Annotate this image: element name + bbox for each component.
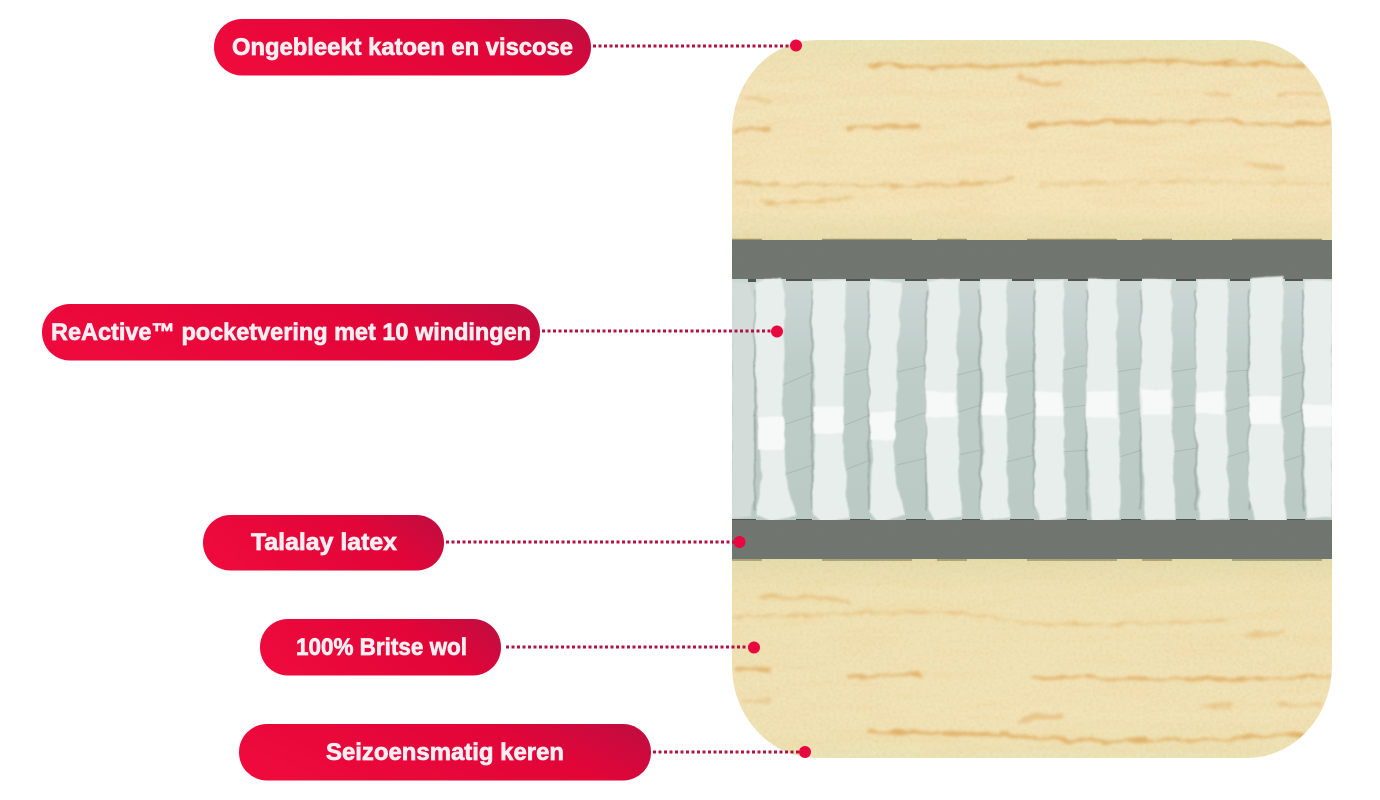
- bottom wool layer: [732, 559, 1332, 758]
- fabric pocket panels: [732, 365, 1303, 475]
- callout: Talalay latex: [203, 515, 746, 570]
- mattress cross-section: [732, 40, 1332, 758]
- callout: Talalay latex: Talalay latex: [251, 529, 398, 556]
- callout: 100% Britse wol: 100% Britse wol: [296, 634, 467, 661]
- lower grey foam layer: [732, 520, 1332, 560]
- callout: Ongebleekt katoen en viscose: Ongebleekt katoen en viscose: [232, 34, 573, 61]
- gaps at pocket tops and bottoms: [732, 279, 1305, 521]
- pocket highlights: [758, 390, 1332, 450]
- callout: Seizoensmatig keren: [239, 724, 811, 780]
- pocket seam shadows: [755, 290, 1303, 510]
- callout: ReActive pocketvering: [42, 304, 783, 360]
- callout: Seizoensmatig keren: Seizoensmatig keren: [326, 739, 564, 766]
- callout: 100% Britse wol: [260, 619, 760, 676]
- white spring pockets: [732, 276, 1332, 525]
- callout: Ongebleekt katoen en viscose: [214, 19, 802, 76]
- callout: ReActive pocketvering: ReActive™ pocketvering met 10 windingen: [51, 319, 531, 346]
- pocket spring layer: [732, 276, 1332, 525]
- upper grey foam layer: [732, 240, 1332, 280]
- top wool layer: [732, 40, 1332, 241]
